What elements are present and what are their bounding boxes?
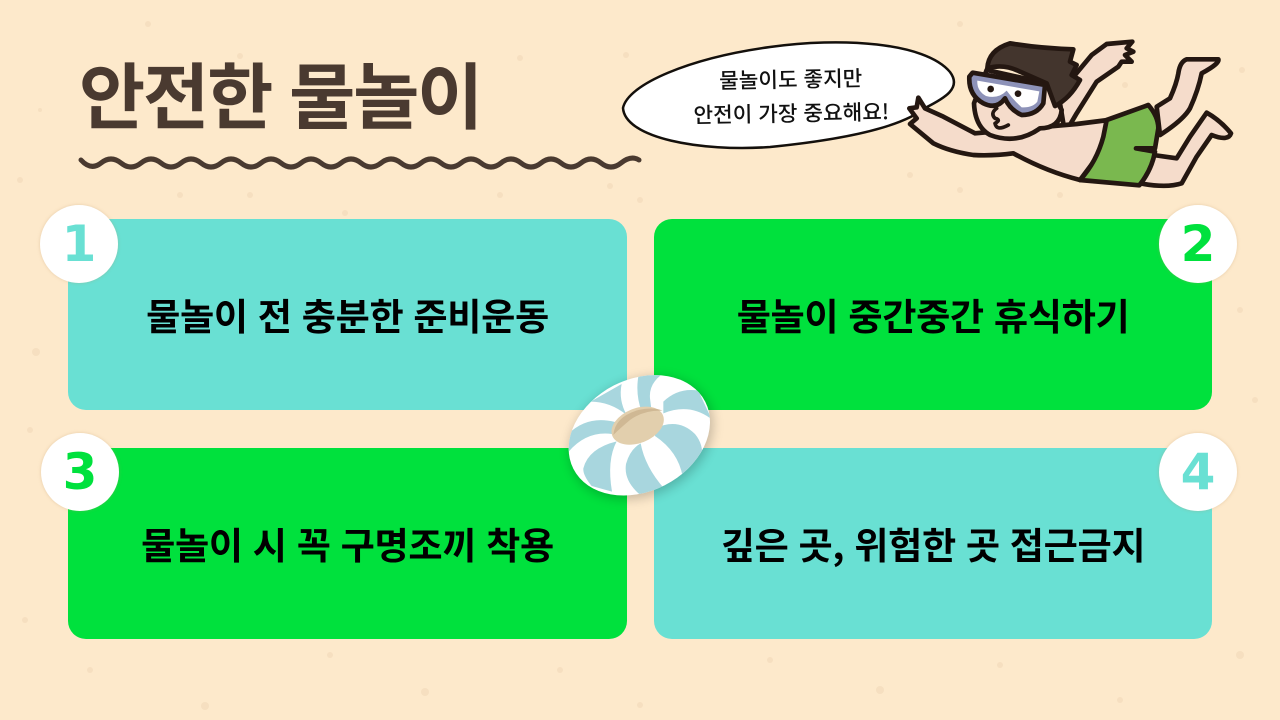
number badge 3 (41, 433, 119, 511)
number badge 2 (1159, 205, 1237, 283)
bubble text: 안전이 가장 중요해요! (693, 95, 889, 130)
card 2: 물놀이 중간중간 휴식하기 (737, 287, 1129, 341)
face (974, 70, 1062, 139)
ring hole (606, 399, 670, 452)
number badge 4: 4 (1181, 443, 1215, 501)
wavy underline (78, 156, 642, 170)
speech bubble (622, 41, 956, 150)
bubble text: 물놀이도 좋지만 (719, 62, 863, 95)
number badge 1: 1 (62, 215, 96, 273)
icon: swim ring (565, 372, 718, 504)
card 1: 물놀이 전 충분한 준비운동 (146, 287, 549, 341)
card 3 (68, 448, 627, 639)
illustration: swimmer (907, 39, 1234, 188)
number badge 3: 3 (63, 443, 97, 501)
hair (987, 43, 1080, 106)
shorts (1080, 105, 1158, 185)
card 4 (654, 448, 1212, 639)
title: 안전한 물놀이 (79, 39, 481, 144)
card 4: 깊은 곳, 위험한 곳 접근금지 (721, 516, 1145, 570)
near leg (1140, 113, 1231, 186)
torso and front arm (909, 98, 1108, 180)
goggles (969, 73, 1045, 115)
card 1 (68, 219, 627, 410)
card 2 (654, 219, 1212, 410)
far leg (1157, 59, 1218, 135)
raised arm (1060, 42, 1133, 133)
number badge 4 (1159, 433, 1237, 511)
number badge 2: 2 (1181, 215, 1215, 273)
card 3: 물놀이 시 꼭 구명조끼 착용 (141, 516, 554, 570)
number badge 1 (40, 205, 118, 283)
bubble text (693, 62, 889, 130)
eyes (987, 86, 1021, 97)
